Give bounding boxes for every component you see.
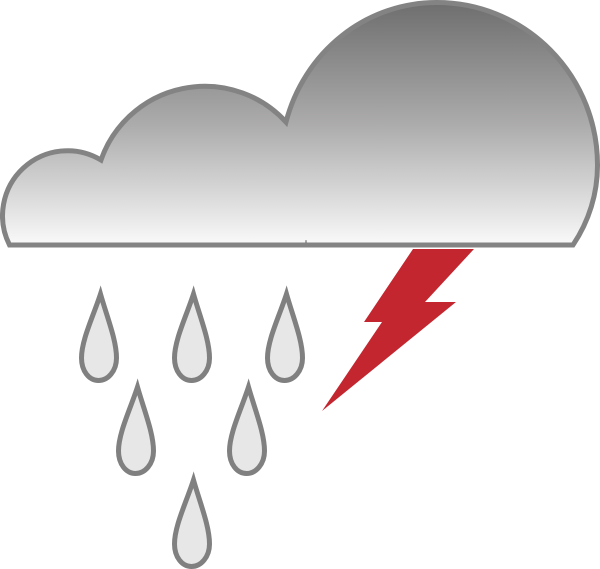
icon: raindrop 6	[174, 480, 210, 566]
icon: raindrop 2	[174, 294, 210, 380]
icon: cloud	[3, 2, 598, 245]
icon: lightning bolt	[322, 249, 474, 411]
icon: raindrop 1	[82, 294, 116, 380]
icon: raindrop 3	[268, 294, 302, 380]
icon: raindrop 5	[230, 387, 264, 474]
icon: raindrop 4	[118, 387, 154, 474]
